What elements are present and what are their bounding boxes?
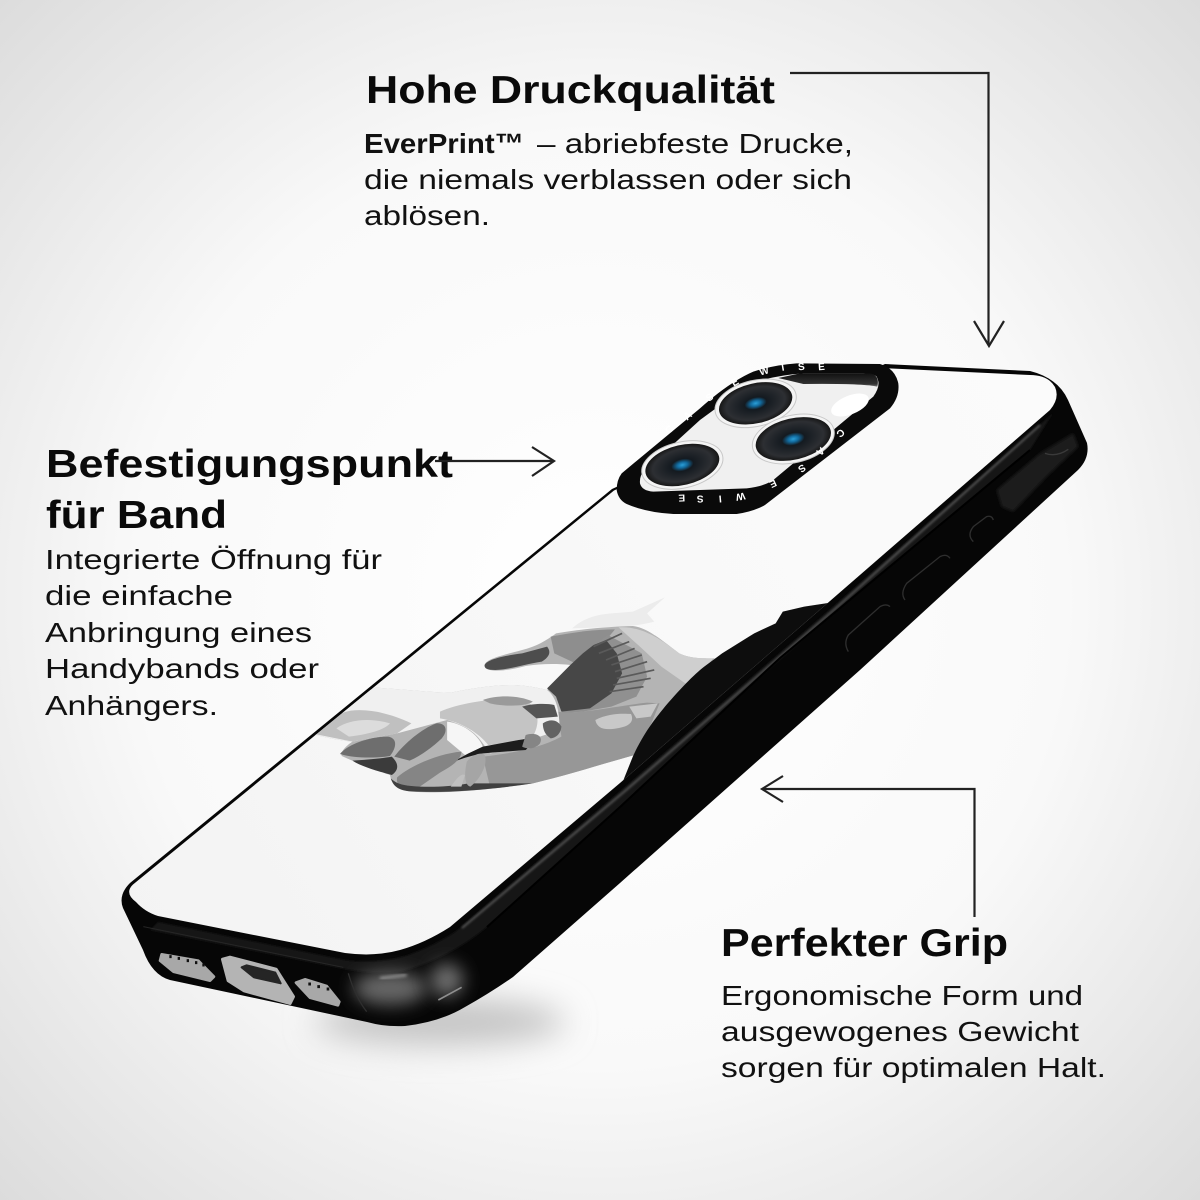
phone case — [122, 362, 1088, 1026]
description: EverPrint™ — [364, 128, 524, 159]
ring lettering: S — [696, 493, 704, 504]
bottom corner gloss — [348, 963, 463, 1012]
ring lettering: W — [734, 490, 746, 502]
callout: Hohe Druckqualität — [364, 69, 853, 231]
heading: Perfekter Grip — [721, 922, 1008, 965]
camera island — [617, 362, 899, 514]
printed artwork: hands — [316, 598, 828, 792]
description — [45, 544, 382, 721]
description: die einfache — [45, 580, 233, 611]
ring lettering: I — [781, 363, 785, 374]
ring lettering: S — [704, 391, 716, 404]
rim highlight — [462, 425, 1040, 928]
island frame — [617, 363, 899, 514]
right speaker — [296, 979, 339, 1005]
arrow: to print surface — [790, 73, 1004, 346]
arrow: to grip side — [762, 776, 974, 917]
description: sorgen für optimalen Halt. — [721, 1052, 1106, 1083]
ring lettering: S — [797, 362, 806, 373]
description — [721, 980, 1106, 1083]
description: Integrierte Öffnung für — [45, 544, 382, 575]
camera opening — [640, 373, 879, 492]
side buttons and flap — [846, 433, 1078, 652]
ring lettering: C — [663, 424, 676, 436]
ring lettering: S — [795, 461, 807, 474]
description — [364, 128, 853, 231]
heading: für Band — [46, 494, 227, 537]
heading: Befestigungspunkt — [46, 443, 453, 486]
description: – abriebfeste Drucke, — [537, 128, 853, 159]
description: ablösen. — [364, 200, 490, 231]
ring lettering: E — [818, 362, 826, 373]
flash — [828, 389, 872, 421]
description: Ergonomische Form und — [721, 980, 1083, 1011]
charging port — [223, 957, 293, 1003]
heading: Hohe Druckqualität — [366, 69, 775, 112]
callout: Befestigungspunkt für Band — [45, 443, 453, 721]
heading — [46, 443, 453, 537]
bottom edge ports — [143, 927, 343, 1005]
ring lettering: E — [678, 492, 685, 503]
inner wall shadow — [778, 373, 878, 387]
ring lettering: I — [718, 493, 722, 504]
ring lettering — [663, 362, 846, 504]
left speaker — [160, 954, 214, 981]
ring lettering: E — [767, 477, 778, 489]
bumper body — [122, 364, 1088, 1026]
description: ausgewogenes Gewicht — [721, 1016, 1079, 1047]
ring lettering: E — [730, 376, 741, 389]
description: Handybands oder — [45, 653, 319, 684]
white back panel — [129, 368, 1057, 954]
lens top — [710, 372, 801, 435]
ring lettering: A — [814, 444, 826, 457]
bumper upper rim band — [150, 413, 1053, 973]
ring lettering: W — [758, 365, 771, 378]
description: die niemals verblassen oder sich — [364, 164, 852, 195]
lens left — [637, 433, 728, 497]
description: Anhängers. — [45, 690, 218, 721]
ring lettering: C — [834, 426, 846, 439]
arrow: to lanyard point — [435, 447, 554, 476]
lens right — [747, 407, 839, 471]
phone drop shadow — [315, 998, 565, 1046]
description: Anbringung eines — [45, 617, 312, 648]
side groove — [487, 450, 1030, 927]
ring lettering: A — [682, 410, 695, 423]
callout: Perfekter Grip — [721, 922, 1106, 1083]
